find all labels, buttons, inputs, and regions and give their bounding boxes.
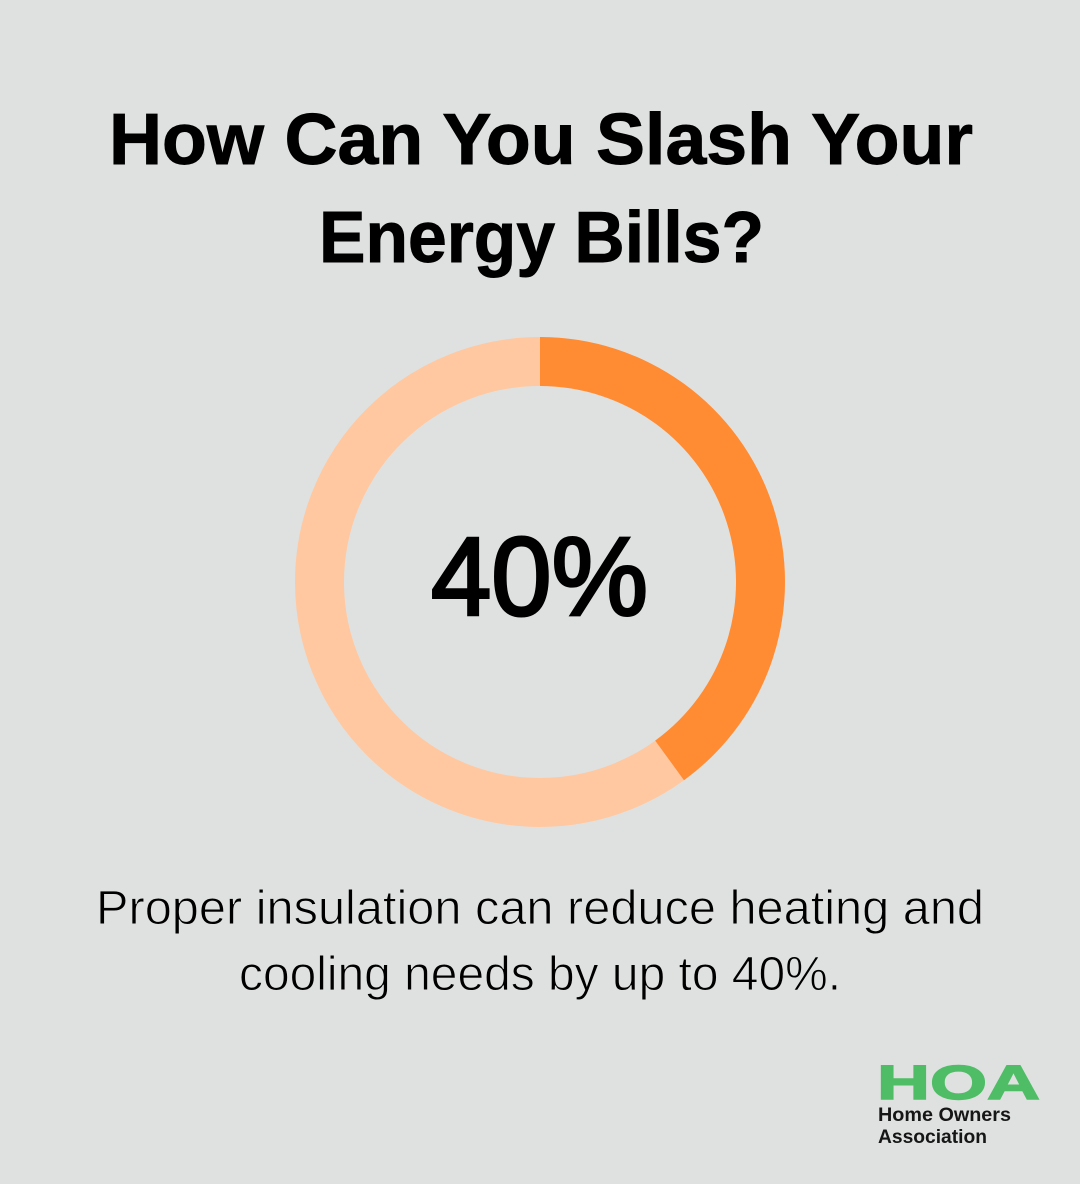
title: How Can You Slash Your: [109, 100, 973, 180]
title: [109, 100, 973, 278]
description text: [96, 882, 984, 1001]
title: Energy Bills?: [319, 198, 764, 278]
donut chart: 40 percent: [320, 337, 785, 802]
logo: HOA Home Owners Association: [877, 1057, 1040, 1148]
description text: Proper insulation can reduce heating and: [96, 882, 984, 935]
donut segment: 40 percent: [540, 337, 785, 780]
logo wordmark: HOA: [877, 1057, 1040, 1110]
donut centre value: 40%: [431, 515, 648, 639]
description text: cooling needs by up to 40%.: [239, 948, 841, 1001]
donut track: remaining 60 percent: [320, 362, 760, 802]
logo tagline: Association: [878, 1127, 987, 1148]
logo tagline: [878, 1105, 1011, 1148]
logo tagline: Home Owners: [878, 1105, 1011, 1126]
